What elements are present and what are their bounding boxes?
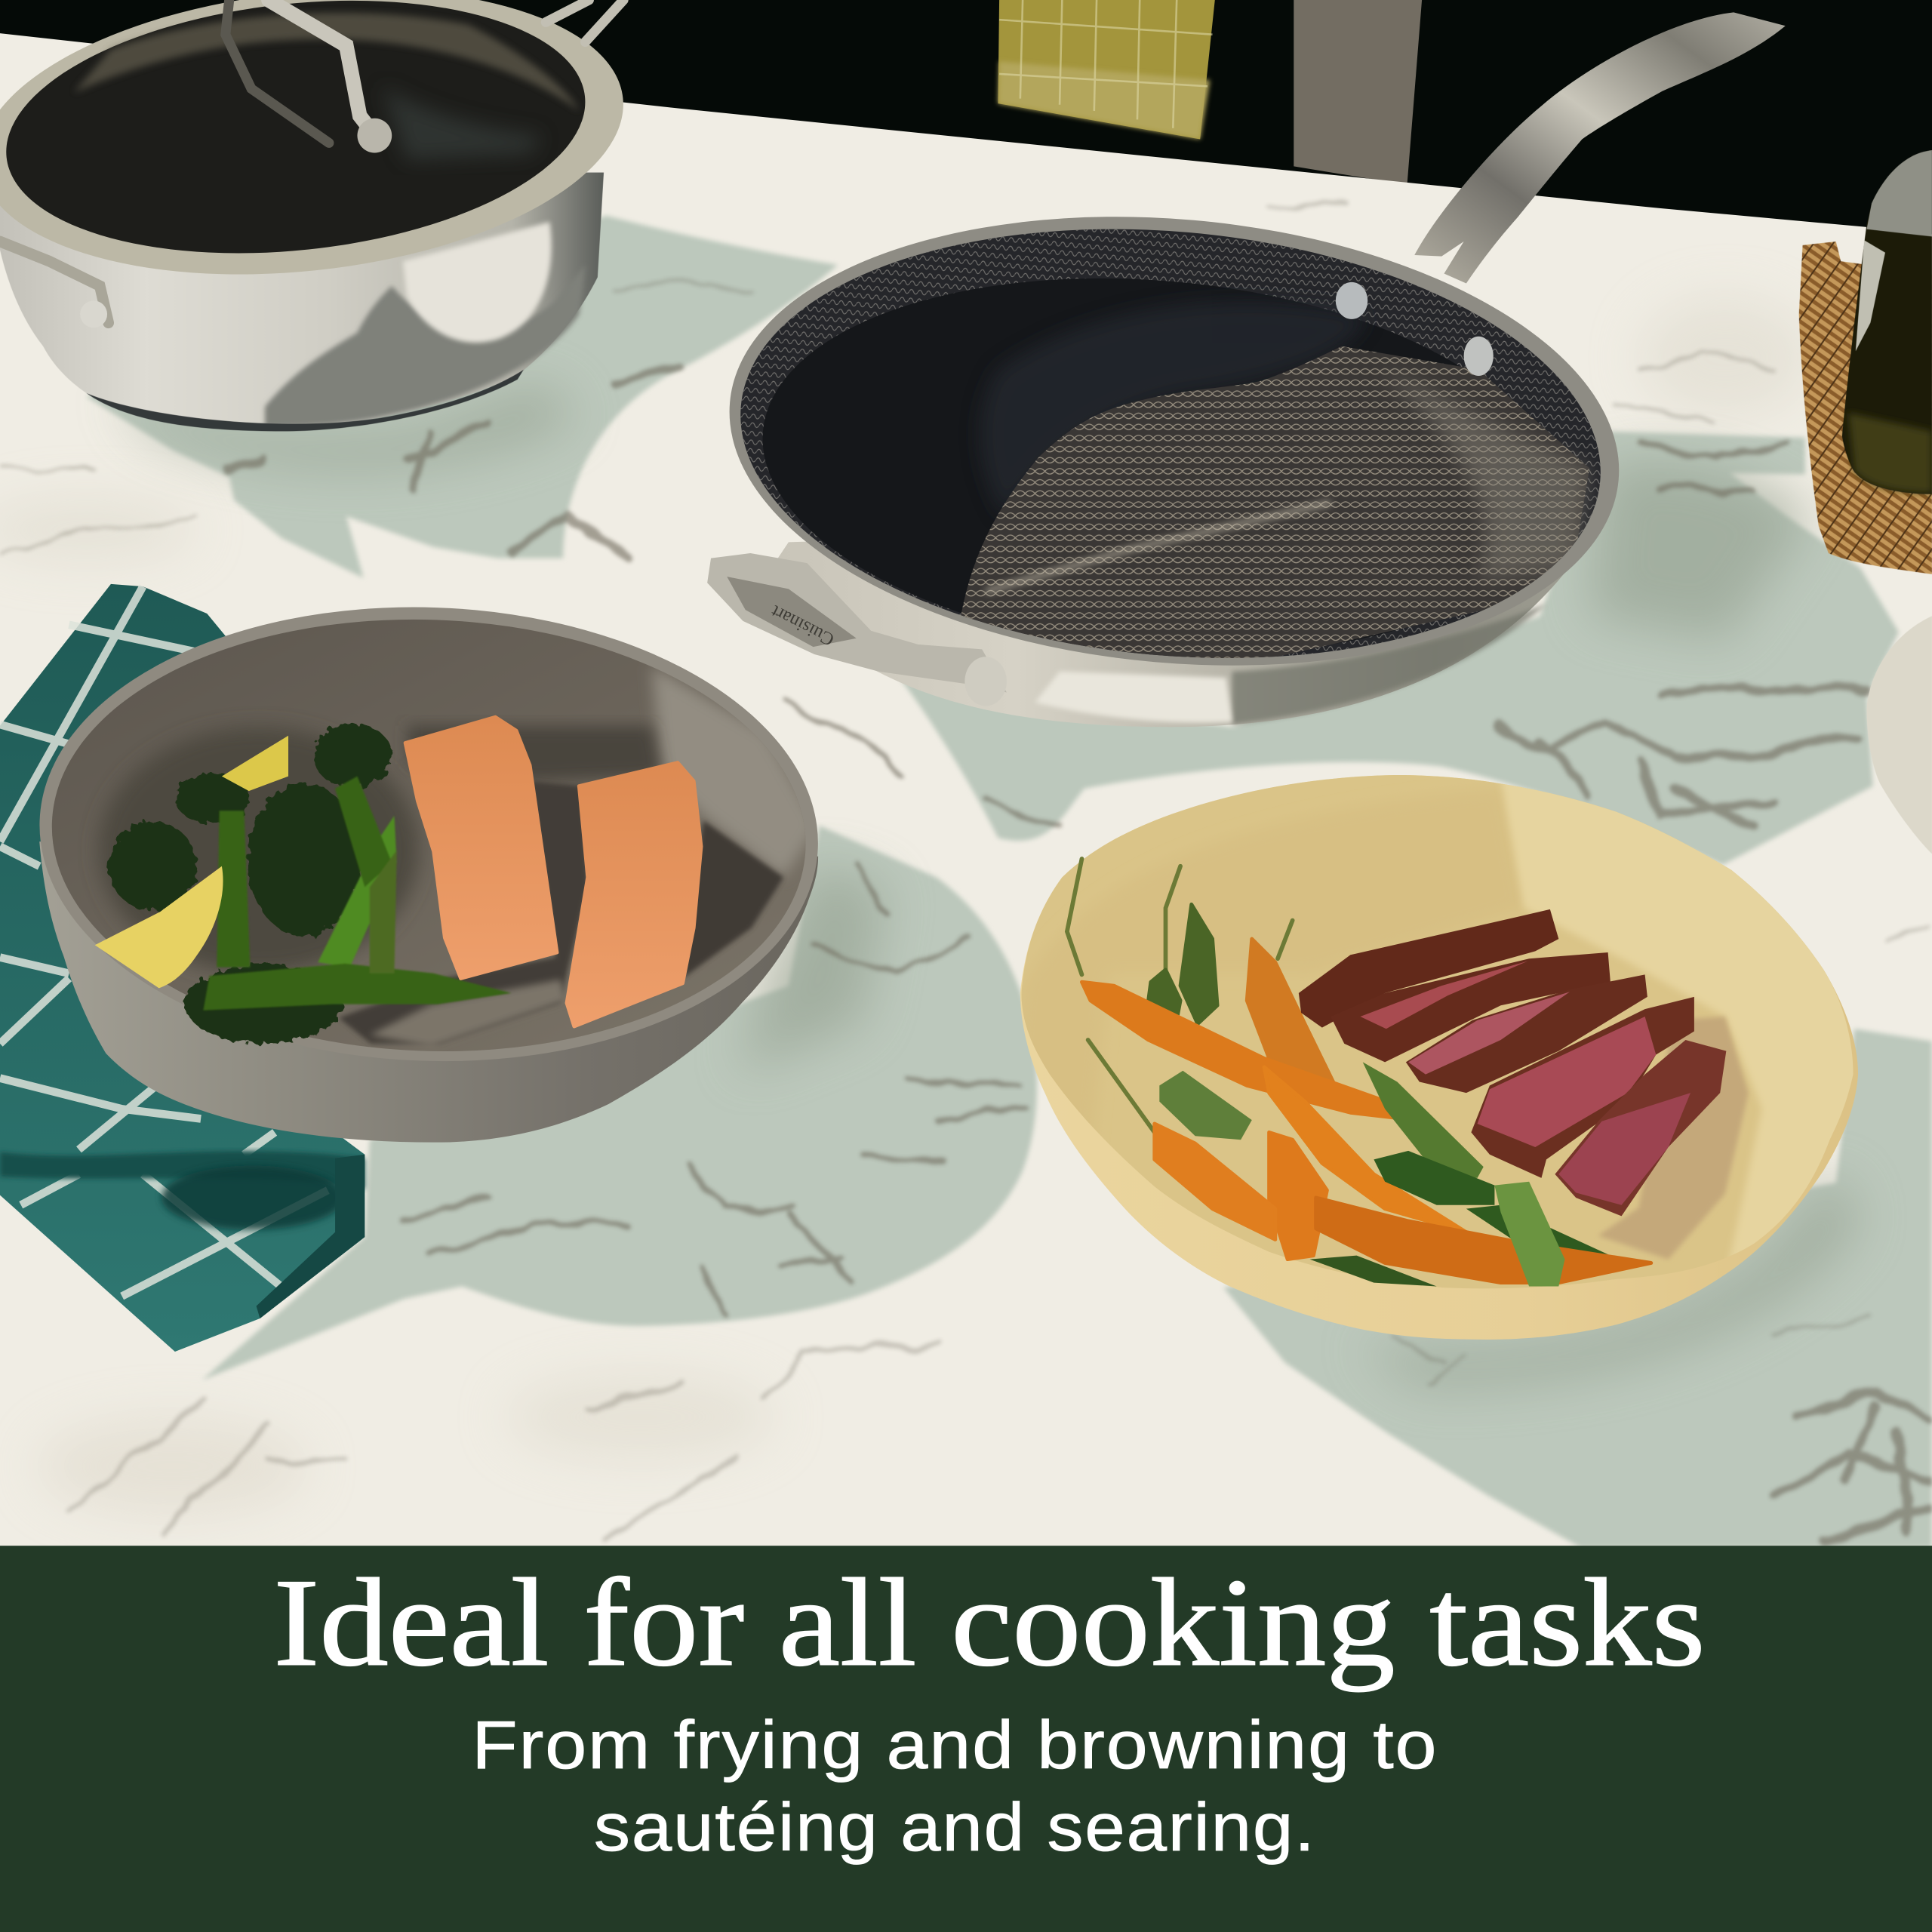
lid handle (226, 0, 377, 143)
shadow band at top of floor (408, 726, 662, 781)
deep contact shadows (111, 382, 1860, 1386)
bowl interior (1011, 764, 1873, 1306)
gray bowl with salmon (32, 594, 826, 1143)
rivets (1336, 282, 1367, 319)
green caption band (0, 1546, 1932, 1932)
glass lid (0, 0, 598, 280)
loop helper handle (707, 553, 1007, 706)
salmon fillet one (405, 717, 557, 978)
skillet rim (711, 181, 1638, 701)
oven steel panel (1294, 0, 1422, 185)
engraved brand: Cuisinart (768, 601, 838, 650)
bowl rim (32, 594, 826, 1075)
yellow hanging towel (998, 0, 1215, 139)
yellow bowl with steak and carrots (1011, 764, 1873, 1340)
bowl outer body (39, 841, 818, 1143)
shadow between fillets (339, 781, 588, 1044)
sunlit inner wall (1501, 764, 1873, 1281)
dim textured floor (980, 301, 1367, 518)
large skillet (707, 12, 1786, 727)
lemon wedge small (222, 736, 288, 791)
long handle (1414, 12, 1786, 284)
broccoli stems (203, 777, 512, 1011)
shadow crescent right (682, 820, 783, 978)
floor left shadow (99, 727, 419, 974)
marble veining (0, 203, 1932, 1544)
woven basket (1799, 150, 1932, 574)
asparagus front (1159, 1062, 1564, 1286)
dark kitchen background (0, 0, 1932, 370)
skillet outer body (764, 518, 1601, 727)
lemon wedge large (95, 866, 223, 988)
pot handles (546, 0, 623, 42)
steak slices (1299, 909, 1726, 1216)
broccoli (109, 723, 392, 1044)
cast shadows on the counter (86, 216, 1932, 1548)
roasted carrots (1081, 939, 1651, 1283)
sunlit surface (958, 346, 1589, 666)
heading: Ideal for all cooking tasks (273, 1554, 1706, 1693)
asparagus behind (1149, 904, 1611, 1286)
subheading line one: From frying and browning to (472, 1708, 1438, 1783)
thin stems (1067, 859, 1293, 1132)
lit right wall (652, 666, 820, 877)
salmon fillet two (567, 763, 701, 1026)
marble counter (0, 33, 1932, 1548)
soft warm marble clouding (0, 296, 1811, 1515)
shaded inner wall (1011, 789, 1524, 1232)
bowl interior (45, 607, 813, 1064)
skillet interior (722, 195, 1619, 692)
lit floor (370, 980, 567, 1048)
bowl outer shape (1020, 775, 1858, 1340)
subheading line two: sautéing and searing. (594, 1790, 1316, 1866)
pale squash (1866, 616, 1932, 854)
glass oil bottle (1842, 150, 1932, 494)
teal plaid napkin (0, 584, 365, 1352)
steak shadow (1598, 1017, 1749, 1260)
pot rim (0, 0, 638, 304)
cooking surface (762, 278, 1460, 643)
stainless pot with glass lid (0, 0, 638, 431)
pot body (0, 173, 604, 428)
